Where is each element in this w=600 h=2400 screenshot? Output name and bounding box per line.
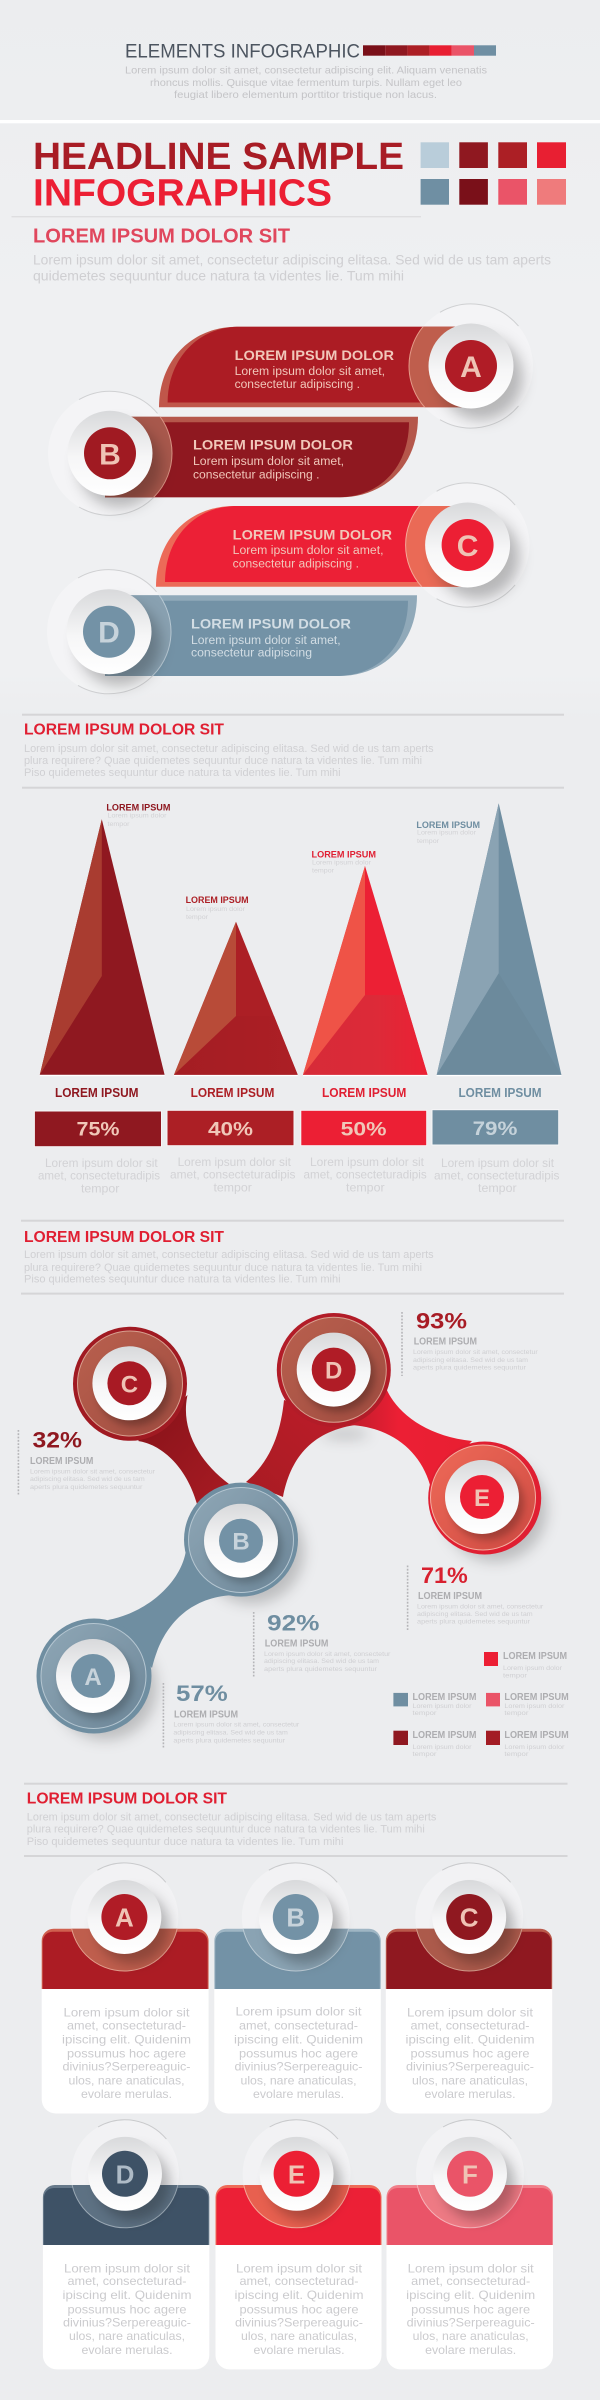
headline: HEADLINE SAMPLE — [33, 136, 404, 178]
section text: network: Piso quidemetes sequuntur duce natura ta videntes lie. Tum mihi — [24, 1273, 341, 1285]
legend item pink: LOREM IPSUM — [504, 1692, 569, 1703]
card B text: divinius?Serpereaguic- — [234, 2060, 362, 2074]
banner D text: LOREM IPSUM DOLOR — [191, 615, 351, 631]
legend item blue — [393, 1692, 476, 1717]
value box 40%: 40% — [208, 1120, 253, 1141]
legend item dark red — [393, 1730, 476, 1758]
section text: network: Lorem ipsum dolor sit amet, consectetur adipiscing elitasa. Sed wid de us tam aperts — [24, 1249, 434, 1261]
legend item crimson: LOREM IPSUM — [504, 1730, 569, 1741]
stat 71% — [408, 1563, 544, 1632]
banner D text: consectetur adipiscing — [191, 648, 312, 660]
legend item dark red: tempor — [412, 1751, 437, 1758]
stat column 2: tempor — [214, 1181, 252, 1195]
banner B text: Lorem ipsum dolor sit amet, — [193, 456, 344, 468]
banner B text: LOREM IPSUM DOLOR — [193, 436, 353, 452]
card F text: ipiscing elit. Quidenim — [406, 2288, 535, 2302]
badge A: A — [460, 351, 482, 384]
banner C text: consectetur adipiscing . — [233, 558, 359, 570]
card D text: evolare merulas. — [82, 2343, 172, 2357]
card C text: possumus hoc agere — [410, 2046, 530, 2060]
node B: B — [232, 1529, 250, 1556]
section text: network — [24, 1249, 434, 1285]
stat 57%: aperts plura quidemetes sequuntur — [173, 1738, 286, 1745]
stat 32% — [18, 1428, 156, 1496]
badge C — [442, 519, 494, 571]
card F text — [406, 2261, 535, 2357]
colour swatches — [421, 142, 566, 205]
header description: feugiat libero elementum porttitor tristique non lacus. — [174, 89, 437, 101]
banner C text — [233, 526, 392, 570]
stat 57%: adipiscing elitasa. Sed wid de us tam — [173, 1730, 288, 1737]
banner D text: Lorem ipsum dolor sit amet, — [191, 635, 341, 647]
callout 2: Lorem ipsum dolor — [186, 906, 246, 913]
stat 93%: 93% — [416, 1309, 467, 1334]
badge F: F — [462, 2159, 478, 2189]
stat column 4: Lorem ipsum dolor sit — [441, 1156, 555, 1170]
section text: cards: Lorem ipsum dolor sit amet, consectetur adipiscing elitasa. Sed wid de us tam aperts — [27, 1812, 437, 1824]
node D: D — [325, 1358, 342, 1385]
stat column 4: tempor — [478, 1181, 517, 1195]
card A text: ipiscing elit. Quidenim — [62, 2032, 191, 2046]
callout 1 — [106, 802, 170, 828]
card D text — [62, 2261, 192, 2357]
callout 1: Lorem ipsum dolor — [108, 812, 167, 820]
stat column 1: tempor — [81, 1181, 119, 1195]
stat 92%: aperts plura quidemetes sequuntur — [264, 1666, 378, 1673]
stat 32%: LOREM IPSUM — [30, 1456, 93, 1467]
stat column 4 — [432, 1085, 560, 1195]
section text: cards: Piso quidemetes sequuntur duce natura ta videntes lie. Tum mihi — [27, 1836, 343, 1848]
node E: E — [474, 1485, 490, 1512]
callout 4: tempor — [417, 838, 440, 845]
card C text: divinius?Serpereaguic- — [406, 2060, 534, 2074]
card B text: evolare merulas. — [253, 2087, 344, 2101]
shadows under nodes — [53, 1429, 547, 1740]
banner C text: LOREM IPSUM DOLOR — [233, 526, 392, 542]
stat column 3: LOREM IPSUM — [322, 1085, 406, 1100]
value box 75%: 75% — [76, 1120, 120, 1141]
intro text — [33, 252, 551, 284]
stat column 4: LOREM IPSUM — [458, 1085, 542, 1100]
stat 92%: adipiscing elitasa. Sed wid de us tam — [264, 1658, 379, 1665]
connectors — [108, 1388, 472, 1668]
top header — [125, 40, 496, 101]
card D text: ulos, nare anaticulas, — [69, 2329, 185, 2343]
banner D — [47, 570, 417, 694]
card F text: evolare merulas. — [425, 2343, 516, 2357]
badge B: B — [99, 438, 121, 471]
card D text: ipiscing elit. Quidenim — [62, 2288, 192, 2302]
card E — [216, 2120, 382, 2369]
stat 93%: adipiscing elitasa. Sed wid de us tam — [413, 1357, 528, 1364]
card F text: possumus hoc agere — [411, 2302, 531, 2316]
banner A text — [235, 347, 394, 391]
triangle chart — [40, 802, 561, 1076]
legend item crimson — [486, 1730, 569, 1758]
stat 71%: aperts plura quidemetes sequuntur — [417, 1619, 531, 1626]
stat column 2: LOREM IPSUM — [191, 1085, 274, 1100]
card F text: ulos, nare anaticulas, — [413, 2329, 529, 2343]
stat 93%: aperts plura quidemetes sequuntur — [413, 1365, 527, 1372]
stat column 3: tempor — [346, 1181, 385, 1195]
node C — [73, 1327, 187, 1441]
badge D — [83, 606, 135, 658]
node B — [184, 1483, 298, 1597]
card C text: evolare merulas. — [424, 2087, 516, 2101]
card A — [42, 1863, 209, 2114]
card A text: evolare merulas. — [81, 2087, 172, 2101]
stat column 2: Lorem ipsum dolor sit — [178, 1155, 292, 1169]
badge D: D — [98, 617, 120, 650]
card D — [43, 2120, 209, 2369]
node C: C — [121, 1371, 138, 1398]
section heading: cards: LOREM IPSUM DOLOR SIT — [27, 1791, 227, 1808]
section heading: triangles: LOREM IPSUM DOLOR SIT — [24, 721, 224, 738]
stat column 3: amet, consecteturadipis — [304, 1168, 427, 1182]
stat column 1: Lorem ipsum dolor sit — [45, 1156, 158, 1170]
stat 57%: LOREM IPSUM — [174, 1709, 238, 1720]
legend item crimson: Lorem ipsum dolor — [504, 1744, 565, 1751]
section text: triangles: plura requirere? Quae quidemetes sequuntur duce natura ta videntes lie. Tum mihi — [24, 755, 422, 767]
badge E: E — [288, 2159, 305, 2189]
connected node diagram — [36, 1313, 547, 1740]
section text: triangles — [24, 743, 434, 779]
triangle 4 — [437, 803, 561, 1076]
section text: triangles: Lorem ipsum dolor sit amet, consectetur adipiscing elitasa. Sed wid de us tam aperts — [24, 743, 434, 755]
card C text — [406, 2006, 535, 2101]
stat 93%: LOREM IPSUM — [414, 1336, 477, 1348]
header colour bar — [363, 45, 496, 56]
badge C: C — [457, 530, 478, 563]
stat column 2 — [167, 1085, 295, 1195]
badge B — [84, 427, 136, 479]
badge A — [101, 1894, 147, 1940]
stat column 1 — [34, 1085, 162, 1195]
stat column 4: amet, consecteturadipis — [434, 1168, 560, 1182]
stat 71%: 71% — [421, 1563, 468, 1588]
stat 92%: Lorem ipsum dolor sit amet, consectetur — [264, 1651, 391, 1658]
callout 4: LOREM IPSUM — [416, 820, 480, 831]
card D text: possumus hoc agere — [68, 2302, 187, 2316]
callout 3 — [312, 850, 376, 874]
stat 93% — [402, 1309, 538, 1376]
stat 71%: Lorem ipsum dolor sit amet, consectetur — [417, 1604, 544, 1611]
badge D — [102, 2151, 148, 2197]
banner D text — [191, 615, 351, 660]
badge B: B — [286, 1902, 305, 1932]
card A text: divinius?Serpereaguic- — [62, 2060, 190, 2074]
legend item pink: Lorem ipsum dolor — [504, 1703, 565, 1710]
value box 50%: 50% — [341, 1120, 387, 1141]
callout 1: tempor — [108, 821, 130, 828]
value box 79%: 79% — [473, 1119, 518, 1140]
triangle 1 — [40, 819, 165, 1076]
legend item crimson: tempor — [504, 1751, 529, 1758]
node A — [36, 1618, 152, 1734]
card B text: ipiscing elit. Quidenim — [234, 2032, 363, 2046]
stat 32%: adipiscing elitasa. Sed wid de us tam — [30, 1476, 145, 1483]
section text: cards — [27, 1812, 437, 1848]
card F — [386, 2120, 553, 2369]
stat column 2: amet, consecteturadipis — [170, 1168, 295, 1182]
banner C text: Lorem ipsum dolor sit amet, — [233, 545, 384, 557]
legend item dark red: LOREM IPSUM — [412, 1730, 476, 1741]
triangle 3 — [303, 866, 428, 1076]
card C text: Lorem ipsum dolor sit — [407, 2006, 534, 2020]
banner B text: consectetur adipiscing . — [193, 469, 320, 481]
stat column 3: Lorem ipsum dolor sit — [310, 1155, 425, 1169]
card A text: possumus hoc agere — [67, 2046, 186, 2060]
callout 2 — [186, 895, 249, 921]
stat 92%: 92% — [267, 1611, 320, 1636]
card A text: ulos, nare anaticulas, — [68, 2073, 184, 2087]
badge E — [274, 2151, 320, 2197]
card C text: ulos, nare anaticulas, — [412, 2073, 528, 2087]
card A text: Lorem ipsum dolor sit — [64, 2006, 190, 2020]
stat 57%: 57% — [176, 1681, 228, 1706]
card B text: possumus hoc agere — [239, 2046, 358, 2060]
node E — [428, 1442, 541, 1554]
card F text: amet, consecteturad- — [411, 2274, 530, 2288]
card E text: evolare merulas. — [254, 2343, 344, 2357]
section text: triangles: Piso quidemetes sequuntur duce natura ta videntes lie. Tum mihi — [24, 767, 341, 779]
banner A text: consectetur adipiscing . — [235, 379, 360, 391]
legend item pink: tempor — [504, 1710, 529, 1717]
legend item red — [484, 1651, 567, 1680]
stat 92% — [254, 1611, 391, 1678]
stat column 1: LOREM IPSUM — [55, 1085, 138, 1100]
stat column 3 — [301, 1085, 427, 1195]
header description: Lorem ipsum dolor sit amet, consectetur adipiscing elit. Aliquam venenatis — [125, 65, 487, 77]
badge B — [273, 1894, 319, 1940]
legend item blue: Lorem ipsum dolor — [412, 1703, 472, 1710]
legend item pink — [486, 1692, 569, 1717]
legend item blue: tempor — [412, 1710, 437, 1717]
card B text: ulos, nare anaticulas, — [240, 2073, 356, 2087]
card F text: divinius?Serpereaguic- — [407, 2316, 535, 2330]
card D text: amet, consecteturad- — [68, 2274, 186, 2288]
banner B text — [193, 436, 353, 481]
banner A text: LOREM IPSUM DOLOR — [235, 347, 394, 363]
headline — [33, 136, 404, 215]
headline: INFOGRAPHICS — [33, 173, 332, 215]
banner A — [159, 304, 533, 428]
card C text: ipiscing elit. Quidenim — [406, 2032, 535, 2046]
header title: ELEMENTS INFOGRAPHIC — [125, 40, 360, 62]
badge C — [446, 1894, 492, 1940]
section text: cards: plura requirere? Quae quidemetes sequuntur duce natura ta videntes lie. Tum mihi — [27, 1824, 425, 1836]
legend — [393, 1651, 569, 1758]
legend item red: Lorem ipsum dolor — [503, 1665, 563, 1672]
stat 57% — [163, 1681, 300, 1749]
legend item blue: LOREM IPSUM — [412, 1692, 476, 1703]
callout 1: LOREM IPSUM — [106, 802, 170, 814]
banner C — [156, 483, 530, 607]
legend item red: LOREM IPSUM — [503, 1651, 567, 1662]
intro text: quidemetes sequuntur duce natura ta videntes lie. Tum mihi — [33, 268, 404, 284]
card A text: amet, consecteturad- — [67, 2018, 186, 2032]
badge A: A — [115, 1902, 134, 1932]
card B text: amet, consecteturad- — [239, 2018, 358, 2032]
card B text — [234, 2004, 363, 2101]
card E text: divinius?Serpereaguic- — [235, 2316, 363, 2330]
card B — [214, 1863, 381, 2114]
legend item dark red: Lorem ipsum dolor — [412, 1744, 472, 1751]
header description — [125, 65, 487, 101]
card E text: possumus hoc agere — [240, 2302, 359, 2316]
badge D: D — [116, 2159, 134, 2189]
badge C: C — [460, 1902, 479, 1932]
callout 4: Lorem ipsum dolor — [417, 830, 477, 836]
node D — [277, 1313, 391, 1427]
card E text — [234, 2261, 364, 2357]
banner A text: Lorem ipsum dolor sit amet, — [235, 366, 385, 378]
callout 4 — [416, 820, 480, 845]
stat 32%: Lorem ipsum dolor sit amet, consectetur — [30, 1469, 156, 1476]
stat 32%: 32% — [32, 1428, 82, 1452]
stat 71%: LOREM IPSUM — [418, 1591, 482, 1602]
badge A — [445, 340, 497, 392]
card B text: Lorem ipsum dolor sit — [236, 2004, 362, 2018]
callout 3: tempor — [312, 868, 335, 874]
stat 92%: LOREM IPSUM — [265, 1638, 328, 1649]
banner B — [48, 391, 418, 515]
card D text: Lorem ipsum dolor sit — [64, 2261, 191, 2275]
card E text: Lorem ipsum dolor sit — [236, 2261, 363, 2275]
intro text: Lorem ipsum dolor sit amet, consectetur adipiscing elitasa. Sed wid de us tam aperts — [33, 252, 551, 268]
card E text: ipiscing elit. Quidenim — [234, 2288, 364, 2302]
stat column 1: amet, consecteturadipis — [38, 1168, 160, 1182]
card A text — [62, 2006, 191, 2101]
stat 32%: aperts plura quidemetes sequuntur — [30, 1484, 143, 1491]
stat 71%: adipiscing elitasa. Sed wid de us tam — [417, 1611, 533, 1618]
card D text: divinius?Serpereaguic- — [63, 2316, 191, 2330]
card E text: ulos, nare anaticulas, — [241, 2329, 357, 2343]
card C — [386, 1863, 552, 2114]
node A: A — [84, 1664, 102, 1691]
card F text: Lorem ipsum dolor sit — [408, 2261, 534, 2275]
section text: network: plura requirere? Quae quidemetes sequuntur duce natura ta videntes lie. Tum mihi — [24, 1262, 422, 1274]
card C text: amet, consecteturad- — [410, 2018, 530, 2032]
legend item red: tempor — [503, 1673, 528, 1680]
callout 3: Lorem ipsum dolor — [312, 860, 372, 866]
callout 2: tempor — [186, 914, 209, 921]
section heading: network: LOREM IPSUM DOLOR SIT — [24, 1229, 224, 1246]
stat 93%: Lorem ipsum dolor sit amet, consectetur — [413, 1349, 538, 1356]
triangle 2 — [174, 922, 298, 1076]
callout 2: LOREM IPSUM — [186, 895, 249, 906]
intro heading: LOREM IPSUM DOLOR SIT — [33, 225, 290, 247]
header description: rhoncus mollis. Quisque vitae fermentum turpis. Nullam eget leo — [150, 77, 462, 89]
callout 3: LOREM IPSUM — [312, 850, 376, 860]
stat 57%: Lorem ipsum dolor sit amet, consectetur — [173, 1722, 300, 1728]
badge F — [447, 2151, 493, 2197]
card E text: amet, consecteturad- — [240, 2274, 358, 2288]
